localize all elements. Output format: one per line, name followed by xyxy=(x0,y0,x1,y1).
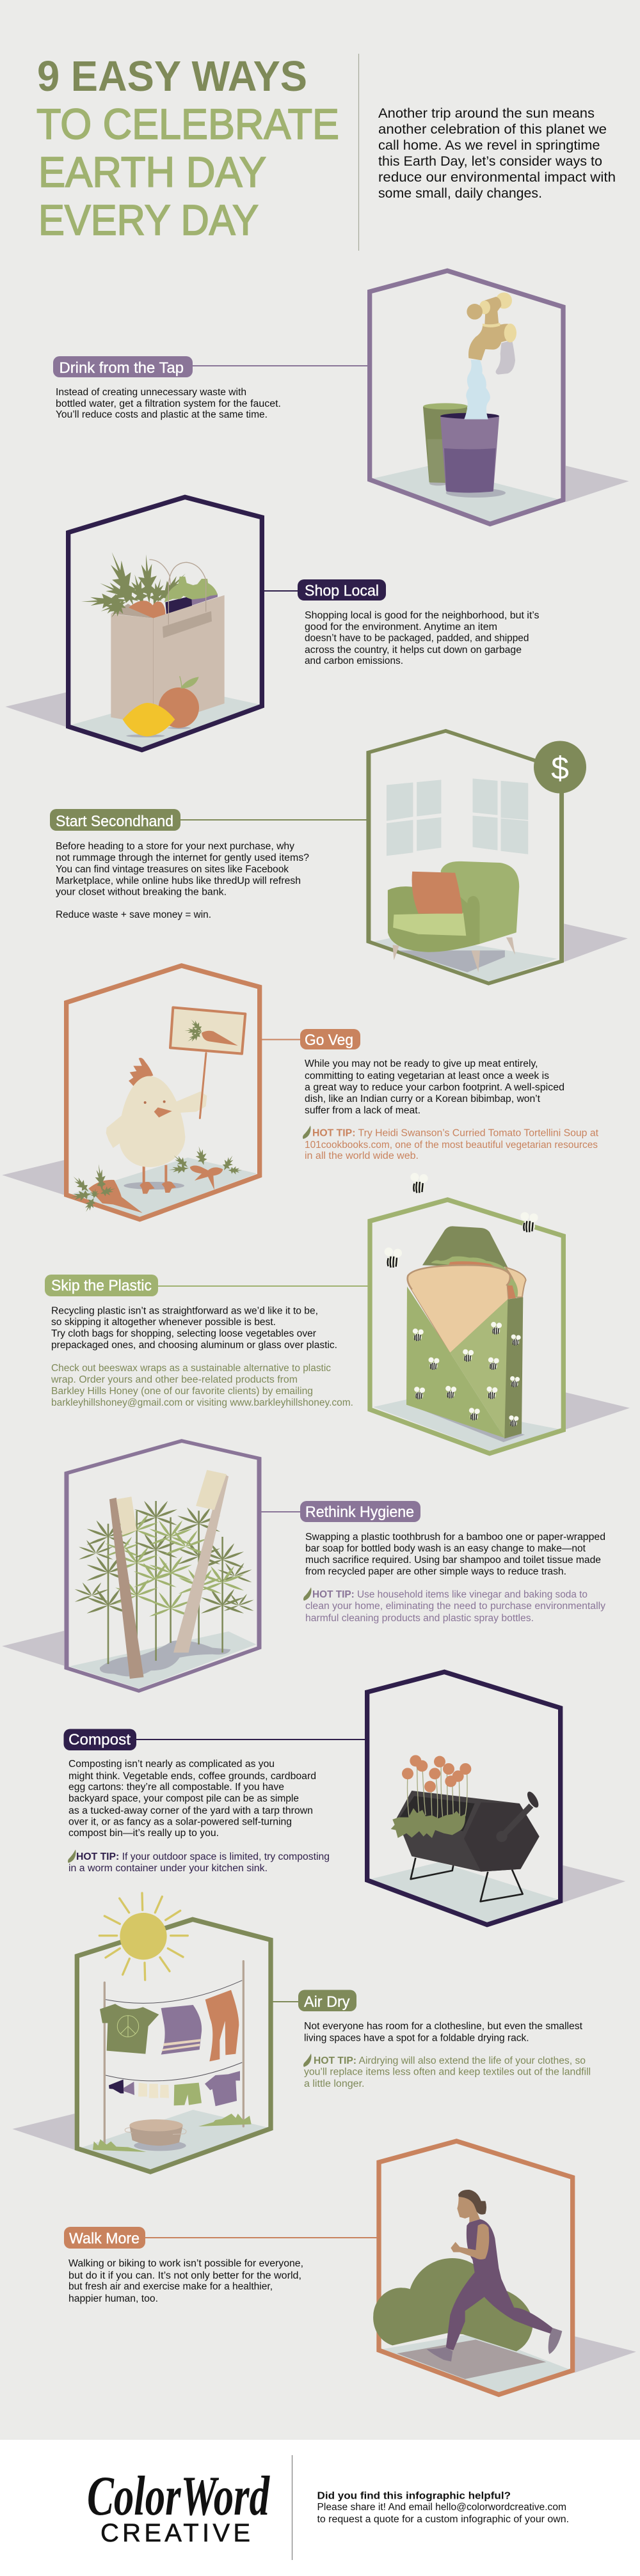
body text: Marketplace, while online hubs like thredUp will refresh xyxy=(56,876,301,886)
hot tip: HOT TIP: Use household items like vinegar and baking soda to xyxy=(312,1589,588,1600)
logo: ColorWord xyxy=(87,2465,270,2527)
body text: Recycling plastic isn’t as straightforward as we’d like it to be, xyxy=(51,1306,318,1316)
bees xyxy=(385,1173,538,1426)
body text xyxy=(56,387,281,420)
badge: Compost xyxy=(64,1729,136,1750)
panel: Walk More xyxy=(64,2141,636,2394)
body text: bottled water, get a filtration system for the faucet. xyxy=(56,398,281,409)
badge: Air Dry xyxy=(298,1990,356,2011)
price sign xyxy=(534,741,586,793)
intro text: Another trip around the sun means xyxy=(378,106,595,121)
title: EARTH DAY xyxy=(38,148,266,196)
footer xyxy=(0,2440,640,2576)
body text: prepackaged ones, and choosing aluminum or glass over plastic. xyxy=(51,1340,337,1351)
intro text: call home. As we revel in springtime xyxy=(378,138,600,153)
illustration: bamboo toothbrushes xyxy=(2,1441,259,1691)
panel: Shop Local xyxy=(5,497,540,750)
hot tip: HOT TIP: Try Heidi Swanson’s Curried Tomato Tortellini Soup at xyxy=(312,1128,599,1138)
connector line xyxy=(157,1285,368,1287)
body text: and carbon emissions. xyxy=(305,656,403,666)
body text xyxy=(305,610,540,666)
panel: Compost xyxy=(64,1672,625,1925)
body text: Not everyone has room for a clothesline, but even the smallest xyxy=(304,2021,583,2032)
body text: happier human, too. xyxy=(68,2293,158,2304)
title: TO CELEBRATE xyxy=(36,100,339,148)
hot tip: a little longer. xyxy=(304,2078,365,2089)
body text: compost bin—it’s really up to you. xyxy=(68,1828,219,1839)
call to action xyxy=(317,2490,569,2525)
title xyxy=(36,52,339,244)
badge: Shop Local: Shop Local xyxy=(305,582,379,600)
body text: Shopping local is good for the neighborhood, but it’s xyxy=(305,610,540,621)
icon: chili pepper xyxy=(68,1850,76,1863)
body text: Before heading to a store for your next purchase, why xyxy=(56,841,294,852)
sun xyxy=(99,1893,188,1980)
logo: CREATIVE xyxy=(100,2519,250,2547)
body text xyxy=(305,1532,605,1577)
hot tip: HOT TIP: If your outdoor space is limited, try composting xyxy=(76,1851,330,1862)
intro text: another celebration of this planet we xyxy=(378,122,607,137)
body text: over it, or as fancy as a solar-powered self-turning xyxy=(68,1816,292,1828)
connector line xyxy=(272,2001,299,2002)
illustration: faucet and glasses xyxy=(370,271,629,524)
body text: so skipping it altogether whenever possible is best. xyxy=(51,1317,276,1328)
body text xyxy=(56,841,309,920)
body text: backyard space, your compost pile can be as simple xyxy=(68,1793,299,1804)
beeswax tip: wrap. Order yours and other bee-related products from xyxy=(51,1374,298,1385)
badge: Start Secondhand: Start Secondhand xyxy=(56,813,173,830)
beeswax tip: barkleyhillshoney@gmail.com or visiting www.barkleyhillshoney.com. xyxy=(51,1397,353,1408)
badge: Skip the Plastic: Skip the Plastic xyxy=(51,1277,152,1294)
badge: Air Dry: Air Dry xyxy=(304,1993,349,2011)
connector line xyxy=(261,1039,301,1040)
body text xyxy=(68,1759,316,1839)
body text: You can find vintage treasures on sites like Facebook xyxy=(56,864,289,875)
body text: Walking or biking to work isn’t possible for everyone, xyxy=(68,2258,303,2269)
connector line xyxy=(264,590,298,592)
connector line xyxy=(192,365,368,366)
body text: not rummage through the internet for gently used items? xyxy=(56,852,309,863)
hot tip: in a worm container under your kitchen sink. xyxy=(68,1863,268,1874)
title: 9 EASY WAYS xyxy=(37,52,307,100)
call to action: Please share it! And email hello@colorwordcreative.com xyxy=(317,2502,566,2513)
icon: chili pepper xyxy=(303,1126,311,1139)
panel: Air Dry xyxy=(12,1893,591,2172)
body text: Composting isn’t nearly as complicated as you xyxy=(68,1759,275,1770)
badge: Walk More: Walk More xyxy=(69,2230,140,2247)
hot tip xyxy=(303,1587,605,1624)
hot tip: clean your home, eliminating the need to purchase environmentally xyxy=(305,1601,605,1612)
hot tip: you’ll replace items less often and keep textiles out of the landfill xyxy=(304,2067,591,2077)
illustration: runner and bush xyxy=(373,2141,636,2394)
body text xyxy=(305,1058,564,1116)
illustration: grocery bag xyxy=(5,497,262,750)
illustration: chicken with sign xyxy=(2,966,260,1220)
intro text: reduce our environmental impact with xyxy=(378,170,616,185)
illustration: secondhand armchair xyxy=(369,731,628,984)
price sign: $ xyxy=(551,750,569,786)
body text: but do it if you can. It’s not only better for the world, xyxy=(68,2270,301,2281)
body text: but fresh air and exercise make for a healthier, xyxy=(68,2281,273,2292)
body text: Try cloth bags for shopping, selecting loose vegetables over xyxy=(51,1328,316,1339)
hot tip: harmful cleaning products and plastic spray bottles. xyxy=(305,1613,534,1624)
panel: Drink from the Tap xyxy=(53,271,629,524)
panel: Go Veg xyxy=(2,966,599,1220)
body text: suffer from a lack of meat. xyxy=(305,1105,420,1116)
body text: much sacrifice required. Using bar shampoo and toilet tissue made xyxy=(305,1555,601,1566)
logo xyxy=(87,2465,270,2547)
illustration: sandwich in beeswax wrap xyxy=(370,1173,630,1454)
intro text: this Earth Day, let’s consider ways to xyxy=(378,154,602,169)
body text: egg cartons: they’re all compostable. If you have xyxy=(68,1782,284,1793)
body text: Reduce waste + save money = win. xyxy=(56,909,211,920)
body text: Instead of creating unnecessary waste with xyxy=(56,387,246,398)
body text: While you may not be ready to give up meat entirely, xyxy=(305,1058,538,1069)
connector line xyxy=(261,1511,301,1512)
icon: chili pepper xyxy=(303,1587,311,1601)
title: EVERY DAY xyxy=(38,196,259,244)
connector line xyxy=(180,819,367,821)
body text: as a tucked-away corner of the yard with a tarp thrown xyxy=(68,1805,313,1816)
hot tip: 101cookbooks.com, one of the most beautiful vegetarian resources xyxy=(305,1140,598,1151)
body text: You’ll reduce costs and plastic at the same time. xyxy=(56,409,268,420)
body text xyxy=(68,2258,303,2304)
hot tip xyxy=(303,1126,599,1161)
body text: dish, like an Indian curry or a Korean bibimbap, won’t xyxy=(305,1094,541,1104)
connector line xyxy=(145,2237,379,2238)
panel: Skip the Plastic xyxy=(45,1173,630,1454)
beeswax tip: Barkley Hills Honey (one of our favorite clients) by emailing xyxy=(51,1386,313,1397)
hot tip: HOT TIP: Airdrying will also extend the life of your clothes, so xyxy=(314,2055,586,2066)
icon: chili pepper xyxy=(303,2054,311,2067)
intro text xyxy=(378,106,616,201)
hot tip xyxy=(303,2054,591,2089)
call to action: Did you find this infographic helpful? xyxy=(317,2490,511,2502)
connector line xyxy=(136,1739,365,1740)
body text xyxy=(304,2021,583,2044)
badge: Compost: Compost xyxy=(68,1731,131,1748)
beeswax tip: Check out beeswax wraps as a sustainable alternative to plastic xyxy=(51,1363,331,1374)
illustration: clothesline and sun xyxy=(12,1893,271,2172)
header divider xyxy=(358,54,360,251)
badge: Rethink Hygiene: Rethink Hygiene xyxy=(305,1504,414,1521)
beeswax tip xyxy=(51,1363,353,1408)
panel: Start Secondhand xyxy=(50,731,628,984)
call to action: to request a quote for a custom infographic of your own. xyxy=(317,2514,569,2525)
body text: might think. Vegetable ends, coffee grounds, cardboard xyxy=(68,1771,316,1782)
panel: Rethink Hygiene xyxy=(2,1441,605,1691)
body text: Swapping a plastic toothbrush for a bamboo one or paper-wrapped xyxy=(305,1532,605,1543)
body text xyxy=(51,1306,337,1351)
body text: living spaces have a spot for a foldable drying rack. xyxy=(304,2032,529,2044)
hot tip xyxy=(68,1850,330,1874)
body text: a great way to reduce your carbon footprint. A well-spiced xyxy=(305,1082,564,1093)
badge: Drink from the Tap: Drink from the Tap xyxy=(59,359,184,377)
intro text: some small, daily changes. xyxy=(378,186,542,201)
body text: across the country, it helps cut down on garbage xyxy=(305,645,522,656)
body text: bar soap for bottled body wash is an easy change to make—not xyxy=(305,1543,586,1554)
body text: committing to eating vegetarian at least once a week is xyxy=(305,1071,549,1081)
body text: from recycled paper are other simple ways to reduce trash. xyxy=(305,1566,566,1577)
body text: good for the environment. Anytime an item xyxy=(305,622,497,632)
badge: Go Veg: Go Veg xyxy=(305,1032,353,1049)
hot tip: in all the world wide web. xyxy=(305,1151,419,1161)
illustration: compost tumbler xyxy=(367,1672,625,1925)
body text: doesn’t have to be packaged, padded, and shipped xyxy=(305,633,529,643)
body text: your closet without breaking the bank. xyxy=(56,886,227,898)
